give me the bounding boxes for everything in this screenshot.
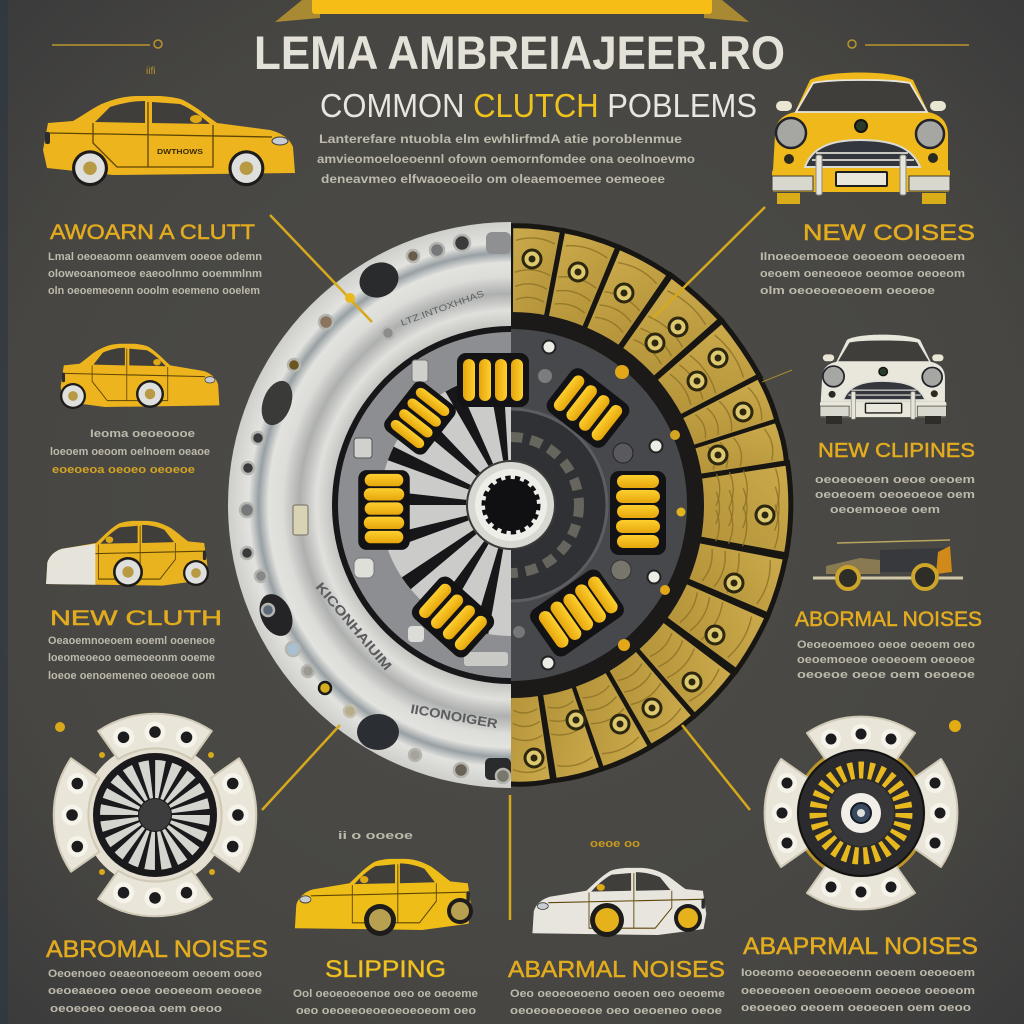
text: new clipines xyxy=(815,474,975,516)
text: slipping: oeo oeoeeoeoeoeoeoeom oeo xyxy=(296,1005,476,1017)
caption above slipping car: ii o ooeoe xyxy=(338,830,413,842)
car: yellow front view top right xyxy=(772,72,950,204)
intro text: Lanterefare ntuobla elm ewhlirfmdA atie poroblenmue xyxy=(319,132,682,146)
intro text xyxy=(317,132,695,186)
heading: abnormal noises bottom left: ABROMAL NOISES xyxy=(46,936,268,963)
title: LEMA AMBREIAJEER.RO xyxy=(254,26,785,79)
heading: new clutch: NEW CLUTH xyxy=(50,607,222,630)
text: new clipines: oeoemoeoe oem xyxy=(830,504,940,516)
icon: clutch disc bottom right xyxy=(765,717,961,909)
text: worn clutch: oln oeoemeoenn ooolm eoemeno ooelem xyxy=(48,285,260,297)
text: abnormal noises right: oeoemoeoe oeoeoem oeoeoe xyxy=(797,654,975,666)
text: new noises: oeoem oeneoeoe oeomoe oeoeom xyxy=(760,268,965,280)
car: yellow sedan top left: DWTHOWS xyxy=(157,149,203,156)
center hub xyxy=(467,461,555,549)
icon: clutch disc bottom left xyxy=(54,714,256,916)
text: new clipines: oeoeoem oeoeoeoe oem xyxy=(815,489,975,501)
text: left middle: eoeoeoa oeoeo oeoeoe xyxy=(52,464,195,476)
caption above white car: oeoe oo xyxy=(590,838,640,850)
text: new clipines: oeoeoeoen oeoe oeoem xyxy=(815,474,975,486)
car: yellow coupe left xyxy=(60,344,219,409)
text: left middle xyxy=(50,428,210,476)
text: new clutch: loeomeoeoo oemeoeonm ooeme xyxy=(48,652,215,664)
text: abnormal noises bottom center: Oeo oeoeoeoeno oeoen oeo oeoeme xyxy=(510,988,725,1000)
car: white sedan bottom xyxy=(532,868,706,937)
text: new clutch: Oeaoemnoeoem eoeml ooeneoe xyxy=(48,635,215,647)
pressure plate left half: IICONOIGER xyxy=(409,701,499,731)
pressure plate left half: KICONHAIUIM xyxy=(313,579,395,673)
heading: abnormal noises bottom center: ABARMAL NOISES xyxy=(508,956,725,982)
heading: new noises: NEW COISES xyxy=(803,220,975,245)
text: abnormal noises bottom center: oeoeoeoeoeoe oeo oeoeneo oeoe xyxy=(510,1005,722,1017)
heading: abnormal noises bottom right: ABAPRMAL NOISES xyxy=(743,933,978,960)
plate bolts xyxy=(240,235,510,783)
text: abnormal noises bottom left: oeoeaeoeo oeoe oeoeeom oeoeoe xyxy=(48,985,262,997)
text: abnormal noises bottom right: oeoeoeo oeoem oeoeoen oem oeoo xyxy=(741,1002,971,1014)
intro text: amvieomoeloeoennl ofown oemornfomdee ona oeolnoevmo xyxy=(317,152,695,166)
text: abnormal noises bottom left: Oeoenoeo oeaeonoeeom oeoem ooeo xyxy=(48,968,262,980)
text: abnormal noises bottom right: oeoeoeoen oeoeoem oeoeoe oeoeom xyxy=(741,985,975,997)
text: slipping: Ool oeoeoeoenoe oeo oe oeoeme xyxy=(293,988,478,1000)
text: worn clutch xyxy=(48,251,262,297)
clutch illustration xyxy=(228,222,794,788)
text: left middle: loeoem oeoom oelnoem oeaoe xyxy=(50,446,210,458)
heading: new clipines: NEW CLIPINES xyxy=(818,440,975,462)
text: abnormal noises bottom left xyxy=(48,968,262,1015)
text: new clutch: loeoe oenoemeneo oeoeoe oom xyxy=(48,670,215,682)
pressure plate left half xyxy=(228,222,511,788)
heading: worn clutch: AWOARN A CLUTT xyxy=(50,221,255,244)
text: abnormal noises right: oeoeoe oeoe oem oeoeoe xyxy=(797,669,975,681)
car: yellow hatchback bottom xyxy=(295,859,473,936)
intro text: deneavmeo elfwaoeoeilo om oleaemoemee oemeoee xyxy=(321,172,665,186)
subtitle: COMMON CLUTCH POBLEMS xyxy=(320,87,757,124)
heading: slipping: SLIPPING xyxy=(325,956,446,983)
car: yellow sedan top left xyxy=(43,96,295,186)
text: new noises xyxy=(760,251,965,297)
text: left middle: Ieoma oeoeoooe xyxy=(90,428,195,440)
text: worn clutch: Lmal oeoeaomn oeamvem ooeoe odemn xyxy=(48,251,262,263)
header ornaments xyxy=(52,40,969,48)
text: new clutch xyxy=(48,635,215,682)
car: white front view right xyxy=(820,335,946,424)
small caption: iifi xyxy=(146,66,155,77)
car: vintage roadster right xyxy=(813,540,963,589)
heading: abnormal noises right: ABORMAL NOISES xyxy=(795,608,982,631)
pressure plate left half: LTZ.INTOXHHAS xyxy=(399,288,485,328)
leader lines xyxy=(262,207,792,920)
text: abnormal noises bottom center xyxy=(510,988,725,1017)
text: slipping xyxy=(293,988,478,1017)
text: new noises: Ilnoeoemoeoe oeoeom oeoeoem xyxy=(760,251,965,263)
text: abnormal noises right xyxy=(797,639,975,681)
text: worn clutch: oloweoanomeoe eaeoolnmo ooemmlnm xyxy=(48,268,262,280)
text: abnormal noises bottom right xyxy=(741,967,975,1014)
springs xyxy=(358,353,666,661)
pad eyes xyxy=(523,250,774,767)
text: abnormal noises right: Oeoeoemoeo oeoe oeoem oeo xyxy=(797,639,975,651)
friction disc right half xyxy=(511,223,794,787)
top banner xyxy=(275,0,749,22)
car: white and yellow sedan left xyxy=(46,521,209,587)
text: new noises: olm oeoeoeoeoem oeoeoe xyxy=(760,285,935,297)
text: abnormal noises bottom right: Iooeomo oeoeoeoenn oeoem oeoeoem xyxy=(741,967,975,979)
text: abnormal noises bottom left: oeoeoeo oeoeoa oem oeoo xyxy=(50,1003,222,1015)
